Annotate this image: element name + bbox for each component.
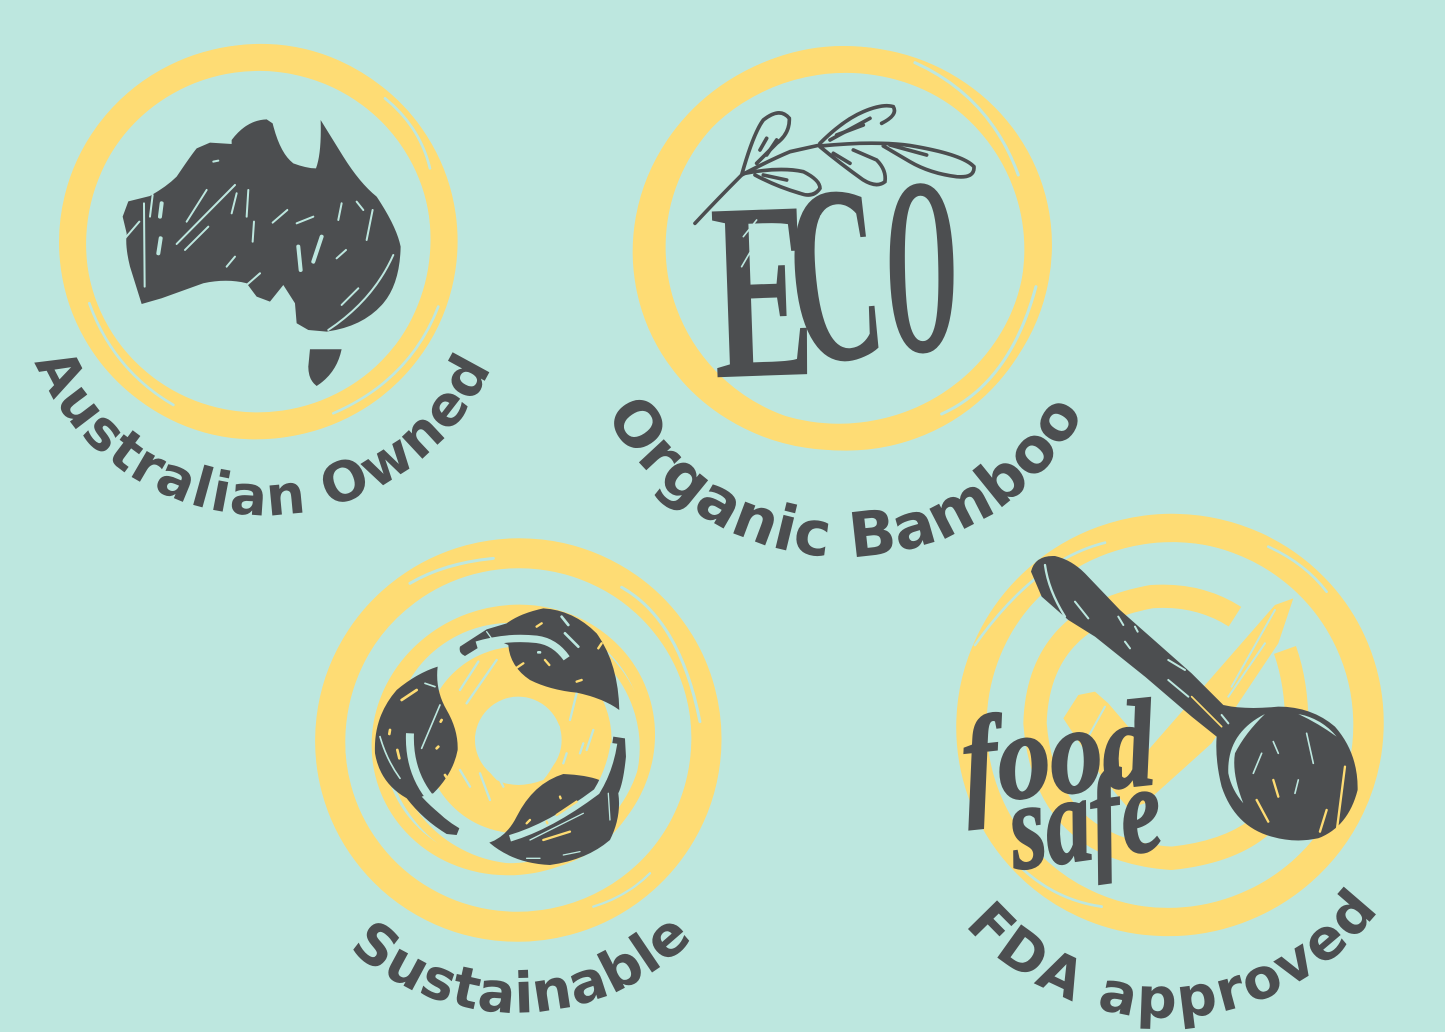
inner ring and check mark <box>1035 596 1297 858</box>
badge: Australian Owned <box>34 44 490 516</box>
label: Sustainable: Sustainable <box>353 923 690 1013</box>
icon: food safe lettering: safe <box>999 740 1169 896</box>
label: Organic Bamboo: Organic Bamboo <box>614 400 1078 557</box>
icon: ECO lettering: E <box>707 150 818 433</box>
icon: spoon <box>1031 556 1358 840</box>
icon: three leaves cycle <box>375 608 626 865</box>
icon: ECO lettering: O <box>883 126 961 407</box>
badge: Sustainable <box>315 538 722 1013</box>
yellow scribble ring: Sustainable <box>271 491 766 989</box>
leaf: left <box>375 667 462 835</box>
yellow scribble ring: Organic Bamboo <box>591 0 1099 501</box>
icon: leaf sprig <box>695 106 974 223</box>
badge: Organic Bamboo <box>614 46 1078 557</box>
icon: ECO lettering <box>707 126 961 433</box>
scribble donut <box>450 660 593 808</box>
icon: ECO lettering: C <box>775 132 895 419</box>
yellow scribble ring: FDA approved <box>915 472 1425 978</box>
icon: food safe lettering: food <box>955 674 1162 830</box>
label: FDA approved: FDA approved <box>968 886 1376 1030</box>
label: Australian Owned: Australian Owned <box>34 352 490 516</box>
icon: map of Australia <box>123 119 401 386</box>
leaf: bottom <box>489 737 626 865</box>
badge: FDA approved <box>955 514 1384 1030</box>
icon: food safe lettering <box>955 674 1169 896</box>
leaf: top <box>460 608 619 710</box>
yellow scribble ring: Australian Owned <box>15 0 502 487</box>
